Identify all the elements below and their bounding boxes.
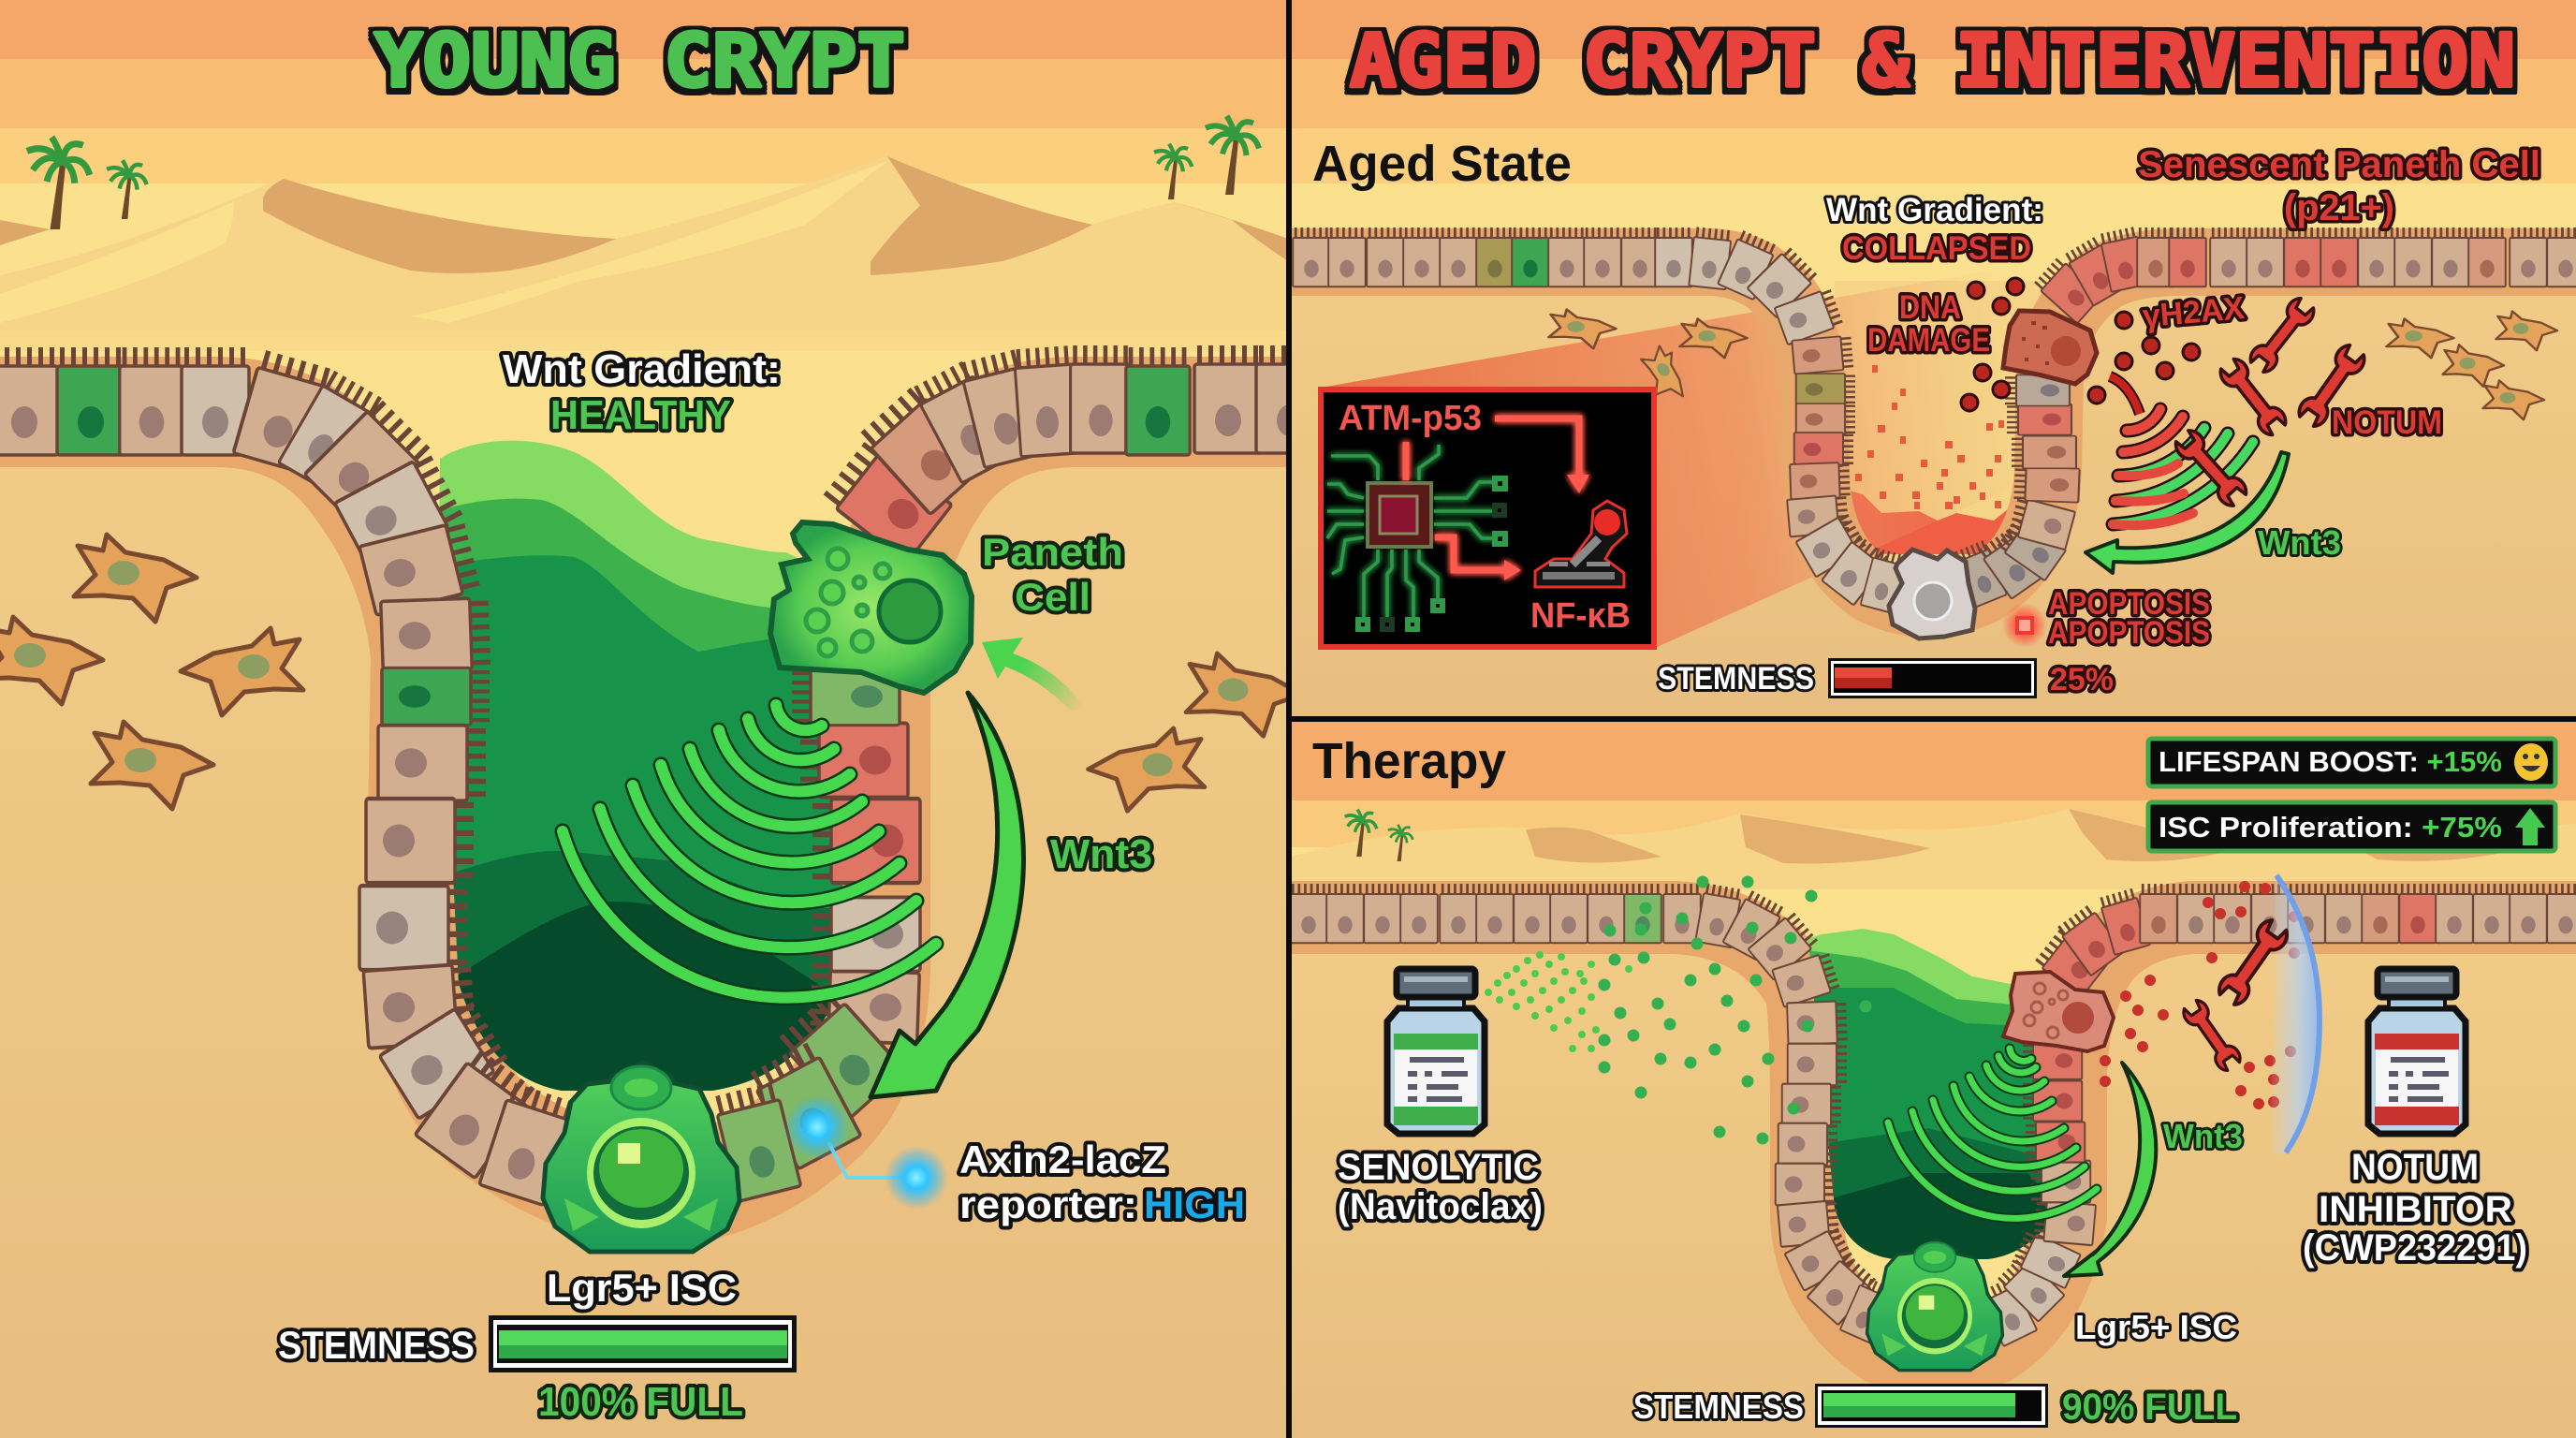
therapy sky background xyxy=(1292,721,2576,1438)
aged sky background xyxy=(1292,0,2576,563)
palm trees xyxy=(27,116,1259,229)
100% full label: 100% FULL xyxy=(538,1379,743,1425)
inhibitor label: INHIBITOR xyxy=(2319,1189,2512,1230)
aged lumen red pool xyxy=(1842,489,2031,554)
Paneth label: Paneth xyxy=(982,530,1123,574)
panel: aged state xyxy=(1282,0,2576,721)
signal arrows xyxy=(1406,418,1589,580)
fibroblast stars xyxy=(0,535,1303,811)
crypt epithelial cells xyxy=(0,355,1324,1205)
aged basement membrane xyxy=(1282,262,2576,604)
ATM-p53 label: ATM-p53 xyxy=(1339,399,1482,438)
NF-kB joystick xyxy=(1535,501,1627,587)
grey apoptotic stem cell xyxy=(1889,550,1975,638)
arrow into Paneth cell xyxy=(982,638,1084,712)
Wnt3 label: Wnt3 xyxy=(1050,831,1152,877)
up arrow icon xyxy=(2515,808,2545,845)
proliferation text: ISC Proliferation: +75% xyxy=(2159,811,2502,844)
Wnt gradient aged label: Wnt Gradient: xyxy=(1826,192,2043,228)
HIGH label: HIGH xyxy=(1144,1182,1245,1226)
title: young crypt: YOUNG CRYPT xyxy=(374,20,905,104)
aged Wnt3 label: Wnt3 xyxy=(2258,523,2341,562)
Wnt gradient label: Wnt Gradient: xyxy=(503,346,781,392)
90% full label: 90% FULL xyxy=(2062,1387,2237,1428)
therapy stem cell xyxy=(1867,1240,2002,1371)
therapy basement membrane xyxy=(1282,917,2576,1357)
Wnt gradient lumen xyxy=(431,441,842,1123)
lifespan text: LIFESPAN BOOST: +15% xyxy=(2159,745,2502,778)
therapy stemness label: STEMNESS xyxy=(1633,1387,1804,1426)
senescent Paneth cell xyxy=(2003,311,2097,384)
Wnt3 arrow xyxy=(871,693,1023,1097)
zoom wedge xyxy=(1321,267,2012,649)
aged sand xyxy=(1282,262,2576,721)
aged stemness label: STEMNESS xyxy=(1658,661,1814,697)
therapy senescent Paneth cell xyxy=(2003,972,2114,1051)
collapsed label: COLLAPSED xyxy=(1842,230,2031,267)
Aged State heading: Aged State xyxy=(1312,136,1572,192)
DAMAGE label: DAMAGE xyxy=(1867,322,1990,359)
sand dunes xyxy=(0,156,1286,330)
basement membrane xyxy=(0,412,1296,1194)
lifespan badge xyxy=(2148,739,2555,786)
chip xyxy=(1368,483,1431,547)
Cell label: Cell xyxy=(1015,575,1090,619)
senescent label: Senescent Paneth Cell xyxy=(2138,144,2540,185)
Lgr5 label: Lgr5+ ISC xyxy=(547,1266,737,1310)
apoptosis label 1: APOPTOSIS xyxy=(2048,586,2210,622)
apoptosis label 2: APOPTOSIS xyxy=(2048,615,2210,651)
therapy epithelial cells xyxy=(1290,888,2576,1346)
therapy palms xyxy=(1345,810,1412,861)
25% label: 25% xyxy=(2050,662,2114,697)
senolytic vial xyxy=(1387,969,1485,1134)
collapsed Wnt particles xyxy=(1855,369,2004,506)
p21 label: (p21+) xyxy=(2284,187,2394,228)
CWP label: (CWP232291) xyxy=(2303,1227,2527,1269)
Axin2 reporter glow xyxy=(785,1095,948,1210)
senolytic label: SENOLYTIC xyxy=(1338,1147,1539,1188)
inhibitor shield xyxy=(2268,873,2320,1154)
stemness label: STEMNESS xyxy=(278,1323,475,1367)
smiley icon xyxy=(2514,743,2548,781)
notum inhibitor vial xyxy=(2368,969,2466,1134)
aged epithelial cells xyxy=(1293,231,2576,613)
gH2AX label: γH2AX xyxy=(2141,290,2247,334)
Axin2 label: Axin2-lacZ xyxy=(959,1137,1166,1181)
desert sky background xyxy=(0,0,1286,1123)
DNA damage dots xyxy=(1961,278,2200,414)
therapy Wnt arcs xyxy=(1888,1049,2097,1218)
sand below tissue xyxy=(0,412,1296,1438)
stemness bar 100% xyxy=(489,1315,797,1372)
circuit terminals xyxy=(1358,478,1505,629)
Lgr5+ stem cell xyxy=(543,1063,739,1252)
therapy Lgr5 label: Lgr5+ ISC xyxy=(2075,1308,2237,1346)
Paneth cell xyxy=(770,522,972,693)
circuit traces xyxy=(1327,445,1498,618)
aged Wnt3 arrow xyxy=(2086,452,2289,573)
stemness bar 90% xyxy=(1815,1384,2048,1428)
ATM-p53 inset xyxy=(1321,389,1654,647)
Therapy heading: Therapy xyxy=(1312,733,1506,789)
aged lumen xyxy=(1835,281,2041,562)
NOTUM debris xyxy=(2105,887,2294,1104)
NOTUM label: NOTUM xyxy=(2332,404,2442,441)
proliferation badge xyxy=(2148,802,2555,851)
aged fibroblasts xyxy=(1548,309,2557,419)
title: aged crypt and intervention: AGED CRYPT & INTERVENTION xyxy=(1350,20,2515,104)
therapy Wnt3 arrow xyxy=(2064,1063,2156,1276)
therapy sand xyxy=(1282,917,2576,1438)
apoptosis marker xyxy=(2002,603,2047,648)
therapy Wnt3 label: Wnt3 xyxy=(2163,1117,2243,1155)
therapy dunes xyxy=(1292,809,2576,889)
panel: therapy xyxy=(1282,721,2576,1438)
stemness bar 25% xyxy=(1828,658,2037,698)
reporter label: reporter: xyxy=(959,1182,1137,1226)
weakened signal arcs xyxy=(2113,409,2253,525)
panel dividers xyxy=(1286,0,2576,1438)
NF-kB label: NF-κB xyxy=(1530,596,1631,636)
senolytic spray xyxy=(1488,882,1866,1138)
navitoclax label: (Navitoclax) xyxy=(1338,1186,1543,1227)
restored Wnt lumen xyxy=(1807,929,2069,1264)
healthy label: HEALTHY xyxy=(550,392,731,438)
NOTUM wrenches xyxy=(2172,295,2368,509)
Wnt signal arcs xyxy=(563,705,936,998)
panel: young crypt xyxy=(0,0,1324,1438)
therapy wrenches xyxy=(2180,917,2291,1073)
DNA label: DNA xyxy=(1899,289,1961,326)
notum label: NOTUM xyxy=(2351,1147,2479,1188)
